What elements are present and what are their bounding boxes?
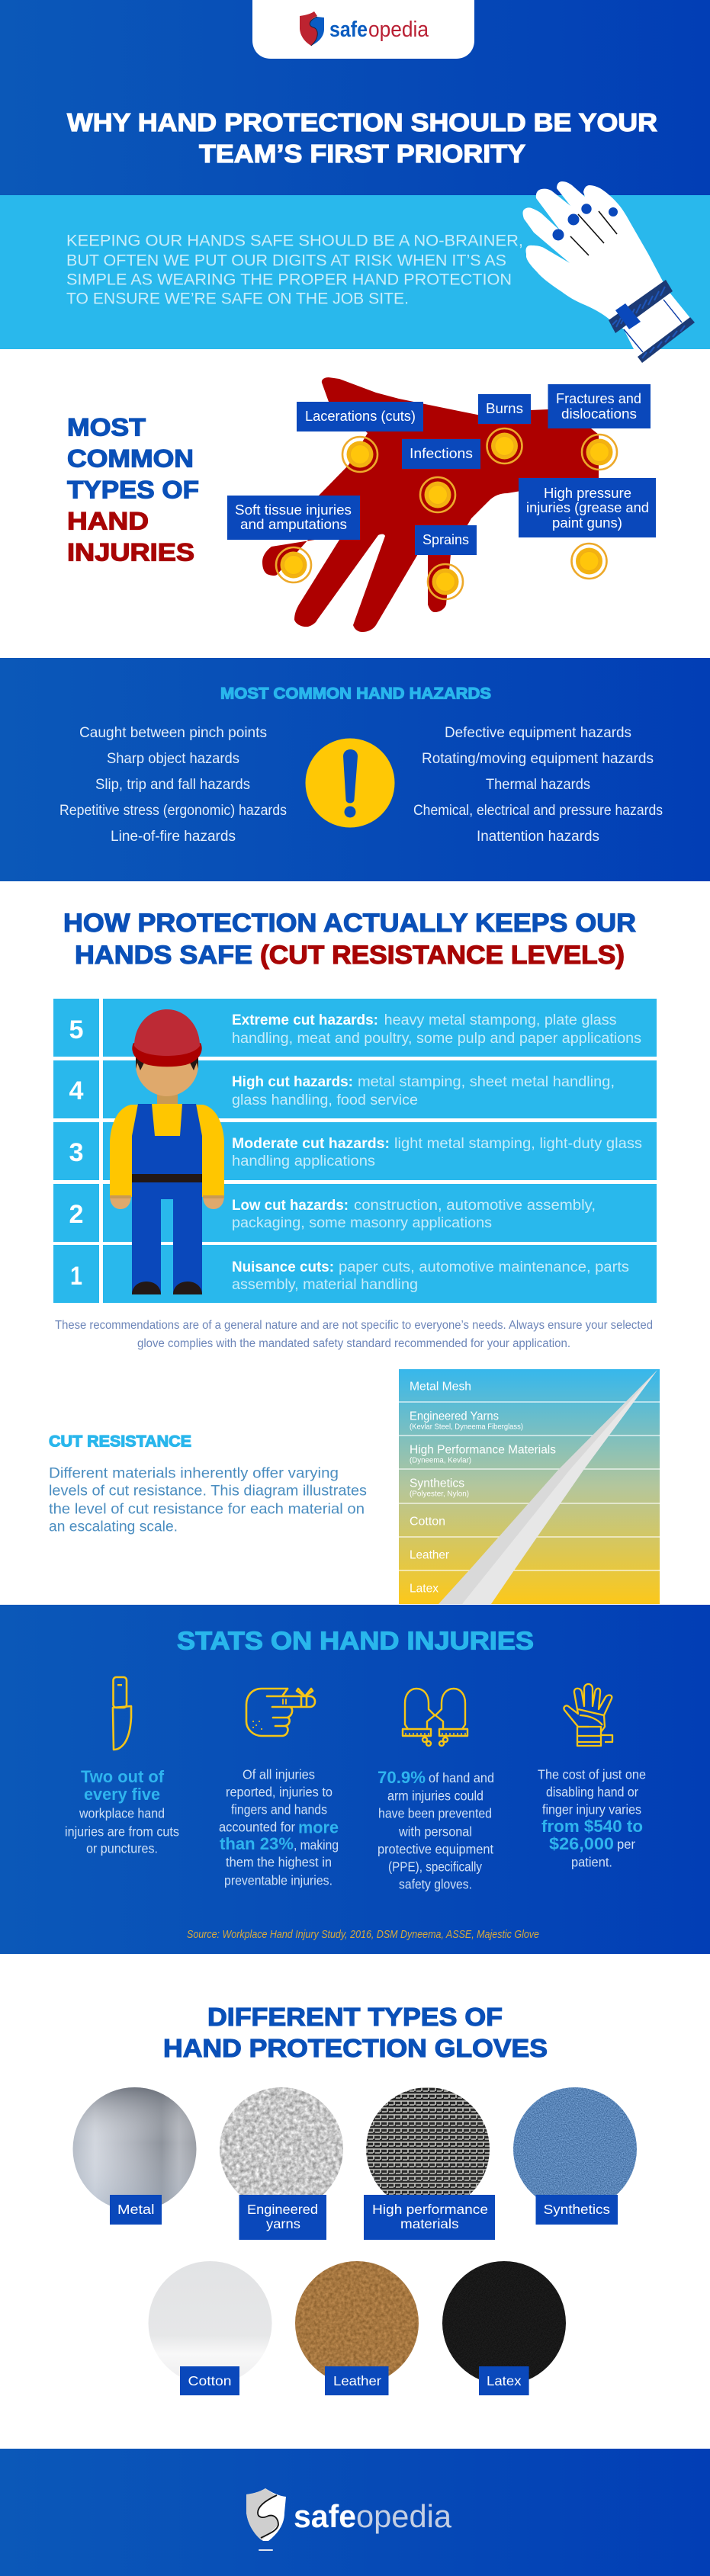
material: high performance: High performance <box>372 2202 488 2217</box>
stat 3: arm injuries could <box>387 1788 484 1804</box>
icon: mittens <box>403 1689 467 1746</box>
hazards list left: Repetitive stress (ergonomic) hazards <box>59 803 287 819</box>
label: infections <box>402 439 480 469</box>
hand silhouette <box>262 377 599 632</box>
heading: how protection: HOW PROTECTION ACTUALLY KEEPS OUR <box>63 909 636 938</box>
hazards list right: Rotating/moving equipment hazards <box>422 751 654 767</box>
stat 2: fingers and hands <box>231 1802 327 1817</box>
level 1: 1 <box>70 1262 82 1291</box>
level 5 <box>53 999 657 1057</box>
material scale chart: (Kevlar Steel, Dyneema Fiberglass) <box>410 1423 523 1432</box>
icon: warning <box>305 738 395 828</box>
label: burns <box>478 394 531 424</box>
hazards list left: Slip, trip and fall hazards <box>95 777 250 793</box>
label: burns: Burns <box>486 401 523 416</box>
heading <box>163 2003 548 2062</box>
heading: MOST <box>67 413 146 441</box>
heading: MOST COMMON HAND HAZARDS <box>220 685 491 703</box>
label: fractures: dislocations <box>561 406 637 422</box>
description: an escalating scale. <box>49 1519 178 1535</box>
heading: HAND <box>67 508 149 535</box>
heading <box>67 413 199 566</box>
heading: HAND PROTECTION GLOVES <box>163 2034 548 2062</box>
hazards list left: Caught between pinch points <box>79 725 267 741</box>
material scale chart: Synthetics <box>410 1477 464 1490</box>
stat 2: them the highest in <box>226 1854 332 1869</box>
material scale chart: (Polyester, Nylon) <box>410 1490 469 1499</box>
stat 3: (PPE), specifically <box>388 1859 482 1874</box>
label: high pressure: injuries (grease and <box>526 500 649 515</box>
heading: COMMON <box>67 445 194 473</box>
level 5: heavy metal stampong, plate glass <box>384 1012 617 1028</box>
stat 1 <box>65 1767 179 1856</box>
material scale chart: Latex <box>410 1583 439 1595</box>
stat 1: every five <box>84 1785 160 1804</box>
hazards list left: Sharp object hazards <box>107 751 239 767</box>
material: metal: Metal <box>117 2202 154 2217</box>
stat 1: Two out of <box>81 1767 165 1786</box>
level 2 <box>53 1184 657 1242</box>
label: infections: Infections <box>410 446 473 461</box>
description <box>49 1465 367 1535</box>
level 2: construction, automotive assembly, <box>354 1198 596 1214</box>
heading: how protection: HANDS SAFE <box>75 941 252 970</box>
stat 3: have been prevented <box>378 1805 492 1821</box>
level 1: assembly, material handling <box>232 1277 418 1293</box>
level 3: light metal stamping, light-duty glass <box>394 1136 642 1152</box>
material: cotton: Cotton <box>188 2373 232 2388</box>
level 3: handling applications <box>232 1153 375 1169</box>
stat 2: reported, injuries to <box>226 1784 333 1799</box>
level 2: 2 <box>69 1200 84 1229</box>
material: engineered yarns <box>220 2087 343 2240</box>
footer logo: safe <box>294 2498 356 2534</box>
label: soft tissue <box>227 496 360 540</box>
stat 1: or punctures. <box>86 1840 158 1856</box>
label: fractures: Fractures and <box>556 391 641 406</box>
description: Different materials inherently offer varying <box>49 1465 339 1482</box>
material scale chart: Engineered Yarns <box>410 1410 499 1423</box>
title <box>67 109 657 168</box>
level 3: 3 <box>69 1138 84 1167</box>
heading: CUT RESISTANCE <box>49 1433 191 1450</box>
logo tab <box>252 0 474 59</box>
material: latex <box>442 2261 566 2395</box>
panel: header <box>0 0 710 195</box>
level 4: High cut hazards: <box>232 1074 353 1090</box>
heading: how protection: (CUT RESISTANCE LEVELS) <box>260 941 625 970</box>
hazards list right: Chemical, electrical and pressure hazards <box>413 803 663 819</box>
material: engineered yarns: yarns <box>266 2216 300 2231</box>
level 4: glass handling, food service <box>232 1092 418 1108</box>
label: soft tissue: and amputations <box>240 517 347 532</box>
level 5: 5 <box>69 1015 84 1044</box>
level 3: Moderate cut hazards: <box>232 1136 390 1152</box>
level 4 <box>53 1060 657 1118</box>
stat 4: The cost of just one <box>538 1767 646 1782</box>
material scale chart: Cotton <box>410 1516 445 1528</box>
icon: bandaged finger <box>246 1689 315 1736</box>
stat 3: 70.9% <box>377 1768 426 1787</box>
stat 3: with personal <box>398 1824 472 1839</box>
heading: DIFFERENT TYPES OF <box>207 2003 503 2031</box>
footnote: glove complies with the mandated safety standard recommended for your application. <box>137 1337 570 1350</box>
stat 2 <box>219 1767 339 1888</box>
stat 3: of hand and <box>429 1770 494 1785</box>
hazards list right: Thermal hazards <box>486 777 590 793</box>
level 1: Nuisance cuts: <box>232 1259 334 1275</box>
heading: INJURIES <box>67 538 194 566</box>
stat 4: finger injury varies <box>542 1802 641 1817</box>
hazards list right: Inattention hazards <box>477 829 599 845</box>
stat 4 <box>538 1767 646 1869</box>
level 4: 4 <box>69 1076 84 1105</box>
material: leather: Leather <box>333 2373 381 2388</box>
stat 4: $26,000 <box>549 1834 614 1853</box>
material: engineered yarns: Engineered <box>247 2202 318 2217</box>
source: Source: Workplace Hand Injury Study, 2016, DSM Dyneema, ASSE, Majestic Glove <box>187 1929 539 1941</box>
intro text: SIMPLE AS WEARING THE PROPER HAND PROTECTION <box>66 271 512 288</box>
label: lacerations <box>297 402 423 431</box>
material: synthetics <box>513 2087 637 2225</box>
material: high performance <box>364 2087 495 2240</box>
material: high performance: materials <box>400 2216 459 2231</box>
intro text: TO ENSURE WE’RE SAFE ON THE JOB SITE. <box>66 290 409 308</box>
stat 2: more <box>298 1817 339 1837</box>
stat 2: Of all injuries <box>243 1767 315 1782</box>
hazards list left <box>59 725 287 845</box>
panel: most common injuries <box>67 377 656 632</box>
label: sprains: Sprains <box>422 532 469 547</box>
panel: cut resistance levels <box>53 999 657 1350</box>
label: high pressure: High pressure <box>544 486 631 501</box>
hazards list left: Line-of-fire hazards <box>111 829 236 845</box>
description: levels of cut resistance. This diagram illustrates <box>49 1482 367 1499</box>
stat 4: from $540 to <box>541 1817 643 1836</box>
stat 3: protective equipment <box>377 1842 493 1857</box>
level 5: handling, meat and poultry, some pulp and paper applications <box>232 1031 641 1047</box>
logo tab: opedia <box>368 18 429 42</box>
icon: knife <box>113 1677 131 1750</box>
material: leather <box>295 2261 419 2395</box>
level 1 <box>53 1245 657 1303</box>
material: synthetics: Synthetics <box>544 2202 610 2217</box>
intro text: BUT OFTEN WE PUT OUR DIGITS AT RISK WHEN IT’S AS <box>66 252 506 270</box>
material scale chart <box>399 1369 660 1604</box>
material scale chart: Metal Mesh <box>410 1380 471 1394</box>
panel: glove types <box>73 2003 637 2395</box>
level 2: packaging, some masonry applications <box>232 1215 492 1231</box>
level 4: metal stamping, sheet metal handling, <box>358 1074 615 1090</box>
hazards list right <box>413 725 663 845</box>
description: the level of cut resistance for each material on <box>49 1500 365 1517</box>
worker figure <box>110 1009 224 1294</box>
heading: STATS ON HAND INJURIES <box>177 1627 534 1654</box>
logo tab: safe <box>329 18 368 42</box>
label: sprains <box>415 525 477 555</box>
panel: footer <box>0 2449 710 2576</box>
intro text: KEEPING OUR HANDS SAFE SHOULD BE A NO-BRAINER, <box>66 232 523 250</box>
stat 1: workplace hand <box>79 1805 165 1821</box>
footnote <box>55 1319 653 1350</box>
heading: how protection <box>63 909 636 970</box>
footer logo <box>246 2488 452 2551</box>
footer logo: opedia <box>356 2498 452 2534</box>
label: fractures <box>548 384 651 428</box>
footnote: These recommendations are of a general nature and are not specific to everyone’s needs. Always ensure your selected <box>55 1319 653 1332</box>
injury markers <box>276 428 617 599</box>
material scale chart: High Performance Materials <box>410 1444 556 1456</box>
material scale chart: Leather <box>410 1549 450 1561</box>
material: latex: Latex <box>487 2373 522 2388</box>
panel: hand hazards <box>0 658 710 881</box>
hazards list right: Defective equipment hazards <box>445 725 631 741</box>
panel: intro band <box>0 181 710 363</box>
level 3 <box>53 1122 657 1180</box>
stat 1: injuries are from cuts <box>65 1824 179 1839</box>
level 1: paper cuts, automotive maintenance, parts <box>339 1259 629 1275</box>
stat 2: accounted for <box>219 1819 295 1834</box>
material: cotton <box>148 2261 271 2395</box>
icon: glove <box>523 181 695 363</box>
stat 2: preventable injuries. <box>224 1872 333 1888</box>
panel: stats <box>0 1605 710 1954</box>
stat 3: safety gloves. <box>399 1877 472 1892</box>
stat 4: per <box>617 1837 635 1852</box>
material: metal <box>73 2087 197 2225</box>
label: lacerations: Lacerations (cuts) <box>305 409 416 424</box>
title: WHY HAND PROTECTION SHOULD BE YOUR <box>67 109 657 137</box>
stat 2: , making <box>294 1837 339 1853</box>
stat 4: disabling hand or <box>546 1784 638 1799</box>
level 5: Extreme cut hazards: <box>232 1012 378 1028</box>
heading: TYPES OF <box>67 476 199 503</box>
level 2: Low cut hazards: <box>232 1198 349 1214</box>
label: high pressure: paint guns) <box>552 515 622 531</box>
stat 4: patient. <box>571 1854 612 1869</box>
icon: glove <box>564 1684 612 1746</box>
panel: cut resistance <box>49 1369 660 1604</box>
title: TEAM’S FIRST PRIORITY <box>199 140 525 168</box>
intro text <box>66 232 523 308</box>
material scale chart: (Dyneema, Kevlar) <box>410 1456 471 1465</box>
label: soft tissue: Soft tissue injuries <box>235 502 352 518</box>
stat 3 <box>377 1768 494 1892</box>
stat 2: than 23% <box>220 1834 294 1853</box>
label: high pressure <box>519 478 656 537</box>
